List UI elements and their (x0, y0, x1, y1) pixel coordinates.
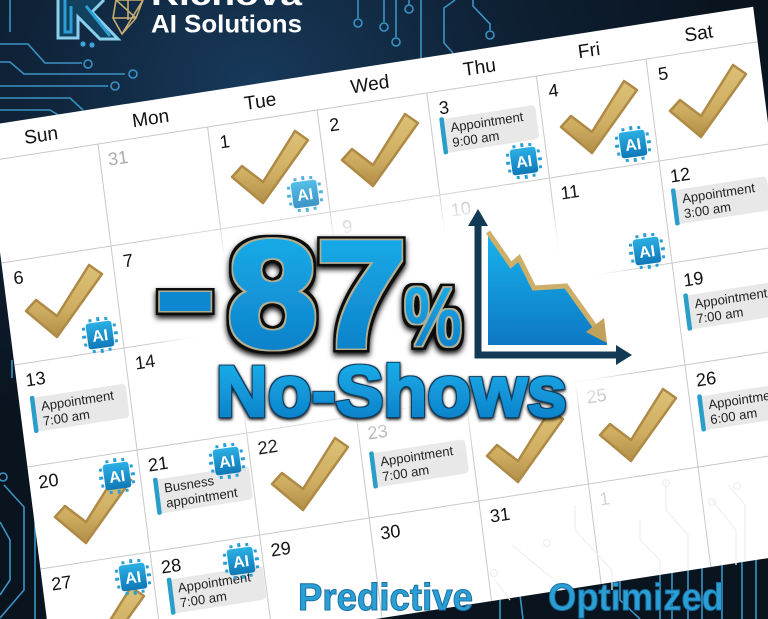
icon: AI chip, Fri 4: AI (624, 136, 642, 155)
date numbers: 1 (218, 131, 231, 152)
date numbers: 28 (160, 555, 182, 578)
circuit lines: bottom right (500, 555, 756, 619)
circuit lines: top centre (354, 0, 494, 58)
weekday headers: Sat (683, 21, 715, 47)
icon: AI chip, Sun 6: AI (91, 327, 109, 346)
appointment 28 (167, 563, 267, 615)
date numbers: 6 (12, 267, 25, 288)
weekday headers: Wed (349, 72, 391, 98)
appointment 21: Busness (163, 473, 215, 496)
icon: AI chip, Sun 6 (80, 315, 120, 355)
appointment 3: Appointment (450, 109, 524, 135)
appointment 3 (439, 103, 539, 155)
appointment 13: 7:00 am (42, 407, 91, 429)
icon: AI chip, Thu 3 (504, 141, 544, 181)
date numbers: 12 (669, 164, 691, 187)
headline: -87%: % (404, 270, 462, 364)
appointment 19 (683, 279, 768, 331)
appointment 28: Appointment (177, 569, 252, 595)
appointment 13 (30, 381, 130, 433)
axis arrowheads (468, 209, 632, 365)
appointment 28: 7:00 am (179, 588, 228, 610)
date numbers: 25 (585, 385, 608, 408)
weekday headers (23, 21, 715, 149)
date numbers: 3 (438, 97, 450, 118)
appointment 3: 9:00 am (451, 128, 500, 150)
icon: AI chip, Mon 28: AI (232, 553, 250, 572)
date numbers: 30 (379, 521, 402, 544)
date numbers: 1 (598, 488, 611, 510)
icon: AI chip, Fri 4 (613, 124, 653, 164)
appointment 23 (369, 437, 469, 489)
date numbers: 31 (107, 147, 129, 170)
icon: AI chip, Tue 1 (285, 174, 325, 214)
date numbers: 23 (366, 421, 389, 444)
date numbers: 22 (256, 436, 279, 459)
appointment 13: Appointment (40, 388, 115, 414)
weekday headers: Mon (131, 106, 170, 132)
headline: -87%: 87 (228, 210, 406, 378)
appointment 21: appointment (165, 485, 239, 511)
icon: AI chip, Mon 21: AI (218, 453, 236, 472)
date numbers: 2 (328, 114, 341, 135)
icon: AI chip, Mon 21 (207, 441, 247, 481)
date numbers: 9 (341, 216, 354, 237)
date numbers: 21 (147, 453, 169, 476)
headline: -87%: - (152, 199, 219, 377)
date numbers: 14 (134, 351, 156, 374)
icon: AI chip, Thu 3: AI (515, 153, 533, 172)
date numbers: 26 (695, 368, 717, 391)
white glow behind headline (165, 205, 625, 420)
chart trend line and arrow (488, 232, 607, 343)
icon: AI chip, Fri 11: AI (638, 243, 656, 262)
date numbers: 4 (547, 80, 560, 101)
date numbers: 31 (489, 504, 511, 527)
weekday headers: Tue (243, 89, 278, 115)
chart area (488, 232, 607, 345)
date numbers: 7 (122, 250, 134, 271)
icon: AI chip, Sun 20 (97, 456, 137, 496)
date numbers: 29 (270, 538, 292, 561)
appointment 12 (671, 174, 768, 226)
icon: AI chip, Sun 27: AI (124, 569, 142, 588)
appointment 19: 7:00 am (695, 304, 744, 326)
date numbers: 11 (559, 181, 580, 204)
date numbers: 27 (50, 572, 73, 595)
date numbers: 5 (657, 63, 669, 84)
chart axes (478, 224, 618, 355)
label: Predictive: Predictive (298, 577, 473, 619)
brand name: AI Solutions (151, 10, 302, 38)
circuit lines: top left (0, 0, 137, 116)
appointment 12: 3:00 am (683, 199, 732, 221)
appointment 26: 6:00 am (709, 405, 758, 427)
icon: AI chip, Sun 27 (113, 557, 153, 597)
appointment 12: Appointment (681, 180, 756, 206)
icon: AI chip, Tue 1: AI (296, 186, 314, 205)
weekday headers: Sun (23, 123, 59, 149)
faint circuit traces on calendar (490, 480, 745, 600)
date numbers: 10 (450, 198, 472, 221)
icon: AI chip, Sun 20: AI (108, 468, 126, 487)
logo (58, 0, 143, 48)
headline: -87% (152, 199, 462, 378)
weekday headers: Fri (577, 39, 601, 63)
appointment 19: Appointment (694, 285, 768, 311)
appointment 26 (697, 380, 768, 432)
date numbers: 19 (682, 268, 705, 291)
date numbers: 24 (476, 404, 498, 427)
brand name (151, 0, 303, 38)
appointment 23: Appointment (379, 443, 454, 469)
weekday headers: Thu (462, 55, 497, 81)
appointment 21 (153, 463, 253, 515)
date numbers: 20 (37, 470, 60, 493)
chart: declining no-shows (468, 209, 632, 365)
icon: AI chip, Mon 28 (221, 541, 261, 581)
label: Optimized: Optimized (548, 577, 724, 619)
appointment 23: 7:00 am (381, 462, 430, 484)
headline: No-Shows: No-Shows (216, 353, 567, 432)
date numbers: 13 (24, 368, 47, 391)
circuit lines: lower left (0, 360, 35, 619)
icon: AI chip, Fri 11 (627, 231, 667, 271)
